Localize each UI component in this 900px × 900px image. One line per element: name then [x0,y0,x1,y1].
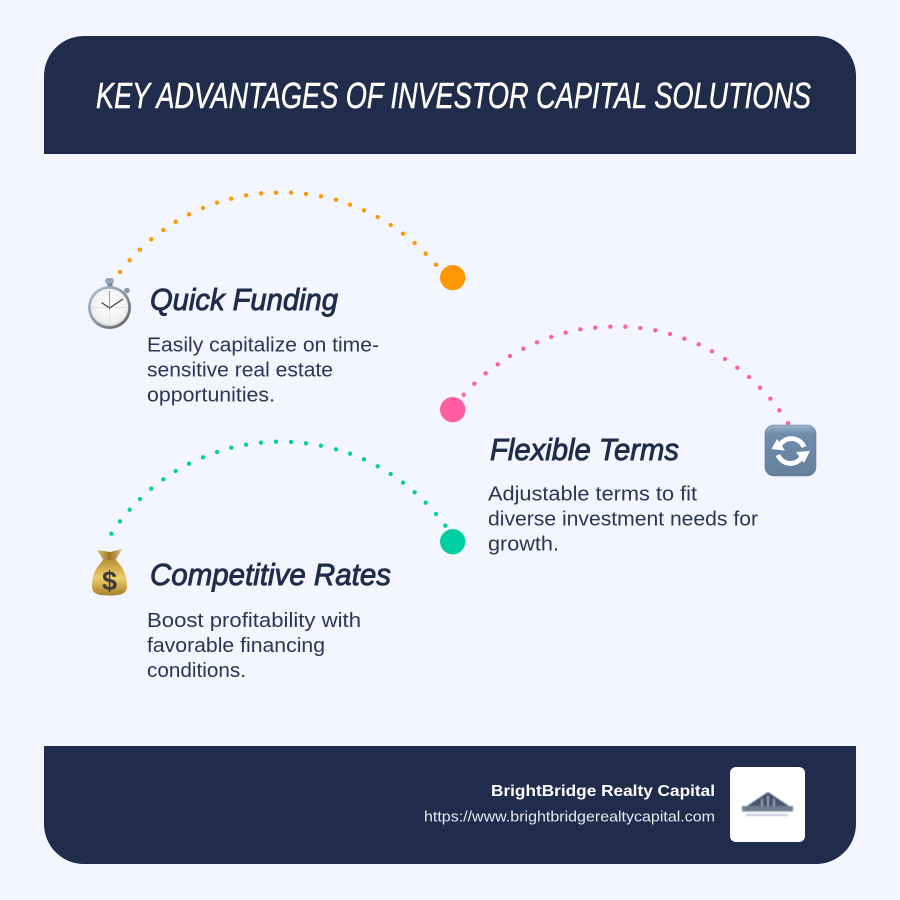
heading: Flexible Terms [490,432,679,467]
description: Easily capitalize on time- [147,334,379,356]
company url: https://www.brightbridgerealtycapital.com [424,810,715,826]
description: favorable financing [147,635,325,657]
icon: stopwatch [88,278,131,329]
panel: quick funding [88,190,465,406]
dotted arc: orange [118,190,438,274]
description: Boost profitability with [147,610,361,632]
node: pink [440,397,465,422]
dotted arc: pink [461,324,790,425]
heading: Quick Funding [150,282,338,317]
description [488,484,758,556]
company name: BrightBridge Realty Capital [491,783,715,800]
description: diverse investment needs for [488,509,758,531]
description: sensitive real estate [147,360,333,382]
description: Adjustable terms to fit [488,484,697,506]
icon: money bag [92,549,127,596]
description: conditions. [147,660,246,682]
node: orange [440,265,465,290]
panel: competitive rates [92,439,465,682]
footer banner [44,746,856,864]
panel: flexible terms [440,324,816,556]
icon: refresh arrows [765,425,816,476]
description: growth. [488,534,559,556]
heading: Competitive Rates [150,557,391,592]
dotted arc: green [109,439,447,536]
header banner [44,36,856,154]
description [147,610,361,682]
logo [730,767,805,842]
icon: money bag: $ [102,566,117,596]
description [147,334,379,406]
description: opportunities. [147,384,275,406]
node: green [440,529,465,554]
